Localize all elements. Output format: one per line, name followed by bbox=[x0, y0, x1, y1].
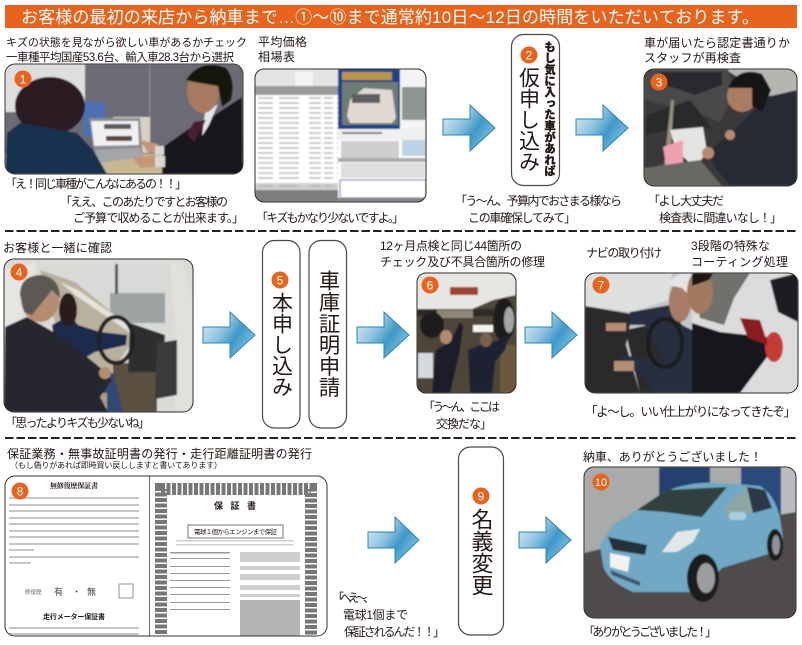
step 3 caption bbox=[644, 35, 790, 65]
step 8 dialogue: 電球1個まで bbox=[343, 607, 408, 622]
step 6 dialogue bbox=[423, 400, 500, 431]
step 1 dialogue: 「え！同じ車種がこんなにあるの！！」 bbox=[5, 176, 187, 191]
step 10 caption: 納車、ありがとうございました！ bbox=[583, 449, 762, 464]
badge 1 bbox=[14, 70, 32, 88]
step 8 caption: 保証業務・無事故証明書の発行・走行距離証明書の発行 bbox=[7, 446, 312, 461]
photo 10: delivered blue car bbox=[584, 467, 796, 618]
photo 8: warranty documents: 修復歴 bbox=[25, 588, 42, 596]
step 7 captions bbox=[586, 238, 788, 269]
badge 5 bbox=[272, 272, 288, 288]
panel: step 9 name change bbox=[458, 447, 504, 635]
step 3 dialogue: 検査表に間違いなし！」 bbox=[659, 211, 782, 225]
average price caption: 相場表 bbox=[258, 50, 295, 64]
panel: step 5 main application: 本申し込み bbox=[270, 292, 293, 397]
step 1 caption: キズの状態を見ながら欲しい車があるかチェック bbox=[6, 35, 247, 49]
badge 9: 9 bbox=[478, 490, 485, 504]
photo 1: customer and salesperson at laptop bbox=[5, 64, 243, 174]
badge 4 bbox=[10, 264, 28, 280]
photo 8: warranty documents: ・ bbox=[72, 587, 81, 597]
arrow bbox=[368, 517, 419, 563]
title banner: お客様の最初の来店から納車まで…①～⑩まで通常約10日～12日の時間をいただいております。 bbox=[21, 8, 759, 27]
badge 3 bbox=[650, 74, 668, 90]
photo 6: underside repair in lift bbox=[417, 273, 516, 393]
step 3 dialogue: 「よし大丈夫だ bbox=[648, 194, 724, 208]
average price caption: 平均価格 bbox=[258, 34, 307, 49]
step 1 dialogue bbox=[5, 176, 244, 225]
step 8 caption: （もし偽りがあれば即時買い戻ししますと書いてあります） bbox=[10, 460, 222, 470]
step 1 caption: 一車種平均国産53.6台、輸入車28.3台から選択 bbox=[6, 50, 234, 64]
badge 7: 7 bbox=[598, 278, 605, 292]
badge 3: 3 bbox=[656, 76, 663, 90]
step 8 dialogue bbox=[332, 591, 445, 639]
step 8 dialogue: 保証されるんだ！！」 bbox=[344, 625, 445, 639]
price table and selection sheet bbox=[255, 69, 426, 202]
panel: step 2 provisional application: もし気に入った車があれば bbox=[543, 41, 556, 177]
badge 5: 5 bbox=[277, 274, 284, 288]
step 2 dialogue: この車確保してみて」 bbox=[468, 210, 576, 225]
photo 8: warranty documents: 走行メーター保証書 bbox=[43, 612, 105, 621]
photo 8: warranty documents: 無 bbox=[87, 586, 96, 597]
step 7 captions: コーティング処理 bbox=[691, 255, 788, 269]
average price caption bbox=[258, 34, 307, 64]
badge 9 bbox=[472, 488, 490, 504]
step 1 caption bbox=[6, 35, 247, 64]
arrow bbox=[519, 517, 571, 563]
badge 7 bbox=[592, 276, 610, 294]
badge 8: 8 bbox=[17, 484, 24, 498]
step 4 caption: お客様と一緒に確認 bbox=[3, 240, 112, 255]
photo 3: staff re-inspecting engine bbox=[644, 69, 797, 186]
step 6 dialogue: 交換だな」 bbox=[436, 417, 492, 431]
photo 4: checking the car with customer bbox=[4, 259, 193, 412]
arrow bbox=[576, 105, 628, 151]
badge 4: 4 bbox=[16, 266, 23, 280]
photo 7: navigation fitting and coating bbox=[585, 270, 798, 393]
badge 6: 6 bbox=[427, 278, 434, 292]
arrow bbox=[443, 105, 495, 151]
step 3 caption: 車が届いたら認定書通りか bbox=[644, 35, 790, 50]
badge 2 bbox=[520, 46, 538, 64]
step 6 caption: 12ヶ月点検と同じ44箇所の bbox=[380, 239, 522, 253]
badge 6 bbox=[422, 276, 438, 294]
step 4 dialogue: 「思ったよりキズも少ないね」 bbox=[5, 415, 150, 430]
badge 8 bbox=[12, 482, 28, 500]
step 3 caption: スタッフが再検査 bbox=[644, 50, 741, 65]
step 8 dialogue: 「へえ～、 bbox=[332, 591, 375, 605]
step 7 captions: ナビの取り付け bbox=[586, 246, 662, 260]
arrow bbox=[203, 312, 255, 358]
step 10 dialogue: 「ありがとうございました！」 bbox=[583, 624, 717, 639]
step 8 caption bbox=[7, 446, 312, 470]
step 6 caption bbox=[380, 239, 545, 269]
step 3 dialogue bbox=[648, 194, 782, 225]
panel: step 2 provisional application: 仮申し込み bbox=[516, 67, 540, 172]
step 7 captions: 3段階の特殊な bbox=[691, 238, 770, 253]
photo 8: warranty documents: 保 証 書 bbox=[214, 500, 256, 511]
badge 10 bbox=[592, 474, 610, 490]
panel: garage certificate application: 車庫証明申請 bbox=[316, 270, 340, 398]
step 6 caption: チェック及び不具合箇所の修理 bbox=[380, 254, 545, 269]
arrow bbox=[525, 312, 577, 358]
photo 8: warranty documents: 無修復歴保証書 bbox=[50, 481, 98, 490]
step 1 dialogue: ご予算で収めることが出来ます。」 bbox=[73, 210, 244, 225]
step 2 dialogue bbox=[455, 193, 622, 225]
badge 1: 1 bbox=[20, 72, 27, 86]
badge 2: 2 bbox=[526, 48, 533, 62]
photo 8: warranty documents bbox=[5, 476, 327, 645]
panel: step 2 provisional application bbox=[512, 34, 560, 186]
photo 8: warranty documents: 有 bbox=[54, 586, 63, 597]
step 6 dialogue: 「う～ん、ここは bbox=[423, 400, 500, 414]
price table dialogue: 「キズもかなり少ないですよ。」 bbox=[256, 210, 404, 225]
badge 10: 10 bbox=[595, 477, 607, 489]
panel: garage certificate application bbox=[309, 240, 346, 428]
panel: step 9 name change: 名義変更 bbox=[468, 508, 494, 596]
arrow bbox=[357, 312, 409, 358]
step 1 dialogue: 「ええ、このあたりですとお客様の bbox=[60, 195, 228, 209]
step 2 dialogue: 「う～ん、予算内でおさまる様なら bbox=[455, 193, 622, 208]
photo 8: warranty documents: 電球１個からエンジンまで保証 bbox=[194, 527, 278, 536]
step 7 dialogue: 「よ～し。いい仕上がりになってきたぞ」 bbox=[585, 404, 796, 419]
panel: step 5 main application bbox=[262, 240, 300, 428]
